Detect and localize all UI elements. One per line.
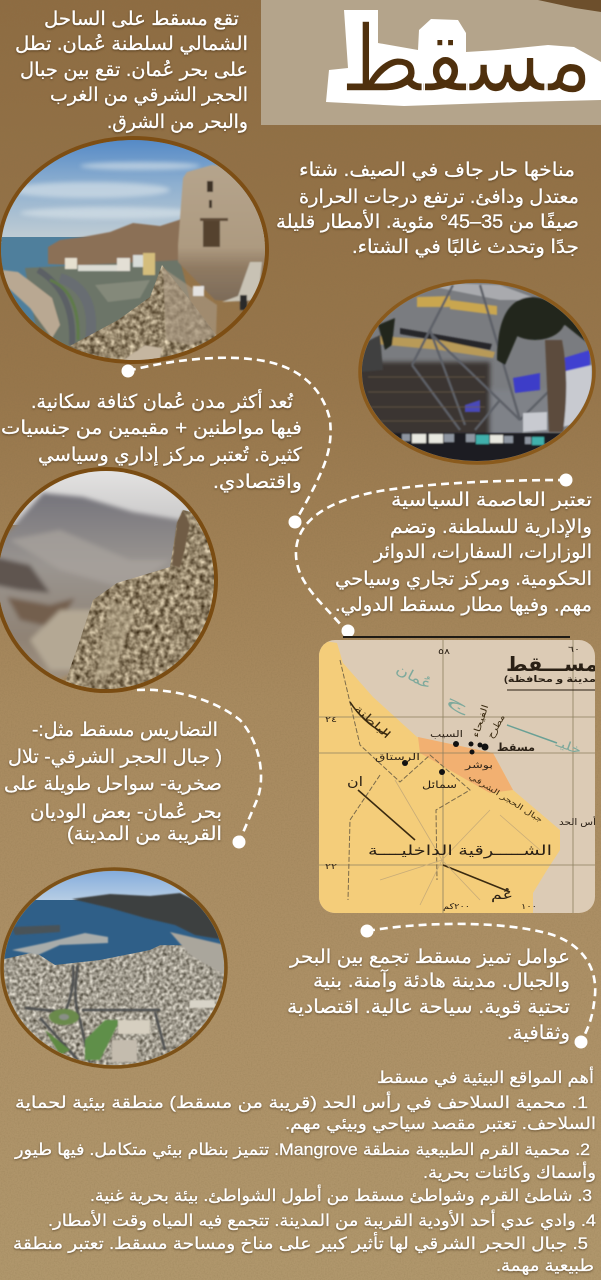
map of Muscat: خليـ bbox=[553, 735, 584, 757]
intro text block bbox=[15, 9, 248, 133]
map of Muscat: السيب bbox=[430, 729, 463, 739]
photo: Muscat airport interior bbox=[355, 280, 600, 473]
map of Muscat: الباطنة bbox=[352, 703, 393, 741]
population text block: فيها مواطنين + مقيمين من جنسيات bbox=[1, 418, 302, 439]
photo: aerial view of Muscat harbour bbox=[0, 868, 230, 1070]
environmental sites text block: السلاحف. تعتبر مقصد سياحي وبيئي مهم. bbox=[285, 1115, 596, 1134]
terrain text block: القريبة من المدينة) bbox=[67, 824, 222, 845]
map of Muscat: ٢٠٠كم bbox=[443, 902, 470, 911]
climate text block: جدًا وتحدث غالبًا في الشتاء. bbox=[352, 237, 579, 258]
capital text block: مهم. وفيها مطار مسقط الدولي. bbox=[335, 595, 592, 616]
environmental sites text block: 4. وادي عدي أحد الأودية القريبة من المدينة. تتجمع فيه المياه وقت الأمطار. bbox=[48, 1209, 596, 1231]
capital text block: الوزارات، السفارات، الدوائر bbox=[373, 542, 592, 563]
map of Muscat: سمائل bbox=[422, 780, 457, 791]
distinguishing factors text block: تحتية قوية. سياحة عالية. اقتصادية bbox=[287, 997, 570, 1018]
distinguishing factors text block bbox=[287, 947, 570, 1044]
map of Muscat: مطرح bbox=[485, 712, 507, 740]
terrain text block bbox=[4, 720, 222, 845]
distinguishing factors text block: عوامل تميز مسقط تجمع بين البحر bbox=[289, 947, 570, 968]
map of Muscat: ٢٤ bbox=[325, 715, 337, 724]
environmental sites text block: طبيعية مهمة. bbox=[496, 1257, 594, 1276]
intro text block: على بحر عُمان. تقع بين جبال bbox=[20, 60, 248, 81]
capital text block: والإدارية للسلطنة. وتضم bbox=[390, 517, 592, 538]
dashed connector 2 bbox=[296, 474, 572, 638]
intro text block: الشمالي لسلطنة عُمان. تطل bbox=[15, 34, 248, 55]
environmental sites text block: 1. محمية السلاحف في رأس الحد (قريبة من مسقط) منطقة بيئية لحماية bbox=[15, 1091, 588, 1113]
photo: mountain landscape bbox=[0, 467, 218, 693]
map of Muscat: ٢٢ bbox=[325, 862, 337, 871]
climate text block: معتدل ودافئ. ترتفع درجات الحرارة bbox=[299, 187, 579, 208]
population text block: تُعد أكثر مدن عُمان كثافة سكانية. bbox=[31, 389, 294, 413]
map of Muscat: الفيحاء bbox=[470, 703, 490, 739]
terrain text block: بحر عُمان- بعض الوديان bbox=[30, 802, 222, 823]
map of Muscat: الرستاق bbox=[375, 752, 420, 762]
map of Muscat: عُم bbox=[491, 887, 513, 903]
environmental sites text block: وأسماك وكائنات بحرية. bbox=[423, 1161, 596, 1183]
terrain text block: صخرية- سواحل طويلة على bbox=[4, 774, 222, 795]
map of Muscat: جبال الحجر الشرقي bbox=[467, 772, 545, 825]
map of Muscat: ج bbox=[443, 690, 475, 718]
map of Muscat bbox=[319, 637, 601, 913]
environmental sites text block: 2. محمية القرم الطبيعية منطقة Mangrove. تتميز بنظام بيئي متكامل. فيها طيور bbox=[14, 1141, 590, 1160]
map of Muscat: مســـقط bbox=[506, 654, 598, 676]
title panel bbox=[261, 0, 601, 125]
terrain text block: ( جبال الحجر الشرقي- تلال bbox=[8, 747, 222, 768]
climate text block bbox=[276, 160, 579, 258]
photo: Muscat fort and corniche bbox=[0, 138, 275, 370]
population text block: واقتصادي. bbox=[213, 472, 302, 493]
map of Muscat: ٦٠ bbox=[568, 645, 580, 654]
capital text block: الحكومية. ومركز تجاري وسياحي bbox=[335, 569, 592, 590]
climate text block: صيفًا من 35–45° مئوية. الأمطار قليلة bbox=[276, 210, 579, 233]
map of Muscat: بوشر bbox=[464, 760, 493, 770]
environmental sites text block: 5. جبال الحجر الشرقي لها تأثير كبير على مناخ ومساحة مسقط. تعتبر منطقة bbox=[13, 1232, 588, 1254]
capital text block bbox=[335, 490, 592, 616]
map of Muscat: ٥٨ bbox=[438, 647, 451, 656]
environmental sites text block: 3. شاطئ القرم وشواطئ مسقط من أطول الشواطئ. بيئة بحرية غنية. bbox=[90, 1184, 592, 1206]
dashed connector 3 bbox=[137, 690, 261, 848]
distinguishing factors text block: وثقافية. bbox=[507, 1023, 570, 1044]
map of Muscat: ١٠٠ bbox=[521, 902, 537, 911]
climate text block: مناخها حار جاف في الصيف. شتاء bbox=[299, 160, 575, 181]
map of Muscat: مسقط bbox=[497, 742, 535, 754]
title sticker: white backing bbox=[326, 10, 601, 106]
population text block bbox=[1, 389, 303, 493]
map of Muscat: ان bbox=[347, 774, 363, 789]
capital text block: تعتبر العاصمة السياسية bbox=[391, 490, 592, 511]
map of Muscat: مدينة و محافظة) bbox=[504, 674, 596, 685]
intro text block: تقع مسقط على الساحل bbox=[44, 9, 239, 30]
intro text block: الحجر الشرقي من الغرب bbox=[50, 85, 248, 106]
map of Muscat: عُمان bbox=[394, 661, 435, 693]
environmental sites text block bbox=[13, 1066, 596, 1276]
terrain text block: التضاريس مسقط مثل:- bbox=[32, 720, 218, 741]
map of Muscat: الشـــــرقية الداخليــــة bbox=[368, 842, 552, 859]
distinguishing factors text block: والجبال. مدينة هادئة وآمنة. بنية bbox=[313, 968, 570, 992]
population text block: كثيرة. تُعتبر مركز إداري وسياسي bbox=[38, 445, 303, 467]
dashed connector 1 bbox=[122, 358, 331, 528]
dashed connector 4 bbox=[360, 924, 595, 1048]
intro text block: والبحر من الشرق. bbox=[107, 112, 248, 133]
map of Muscat: رأس الحد bbox=[559, 816, 601, 827]
environmental sites text block: أهم المواقع البيئية في مسقط bbox=[377, 1066, 594, 1088]
title: مسقط bbox=[340, 9, 593, 111]
